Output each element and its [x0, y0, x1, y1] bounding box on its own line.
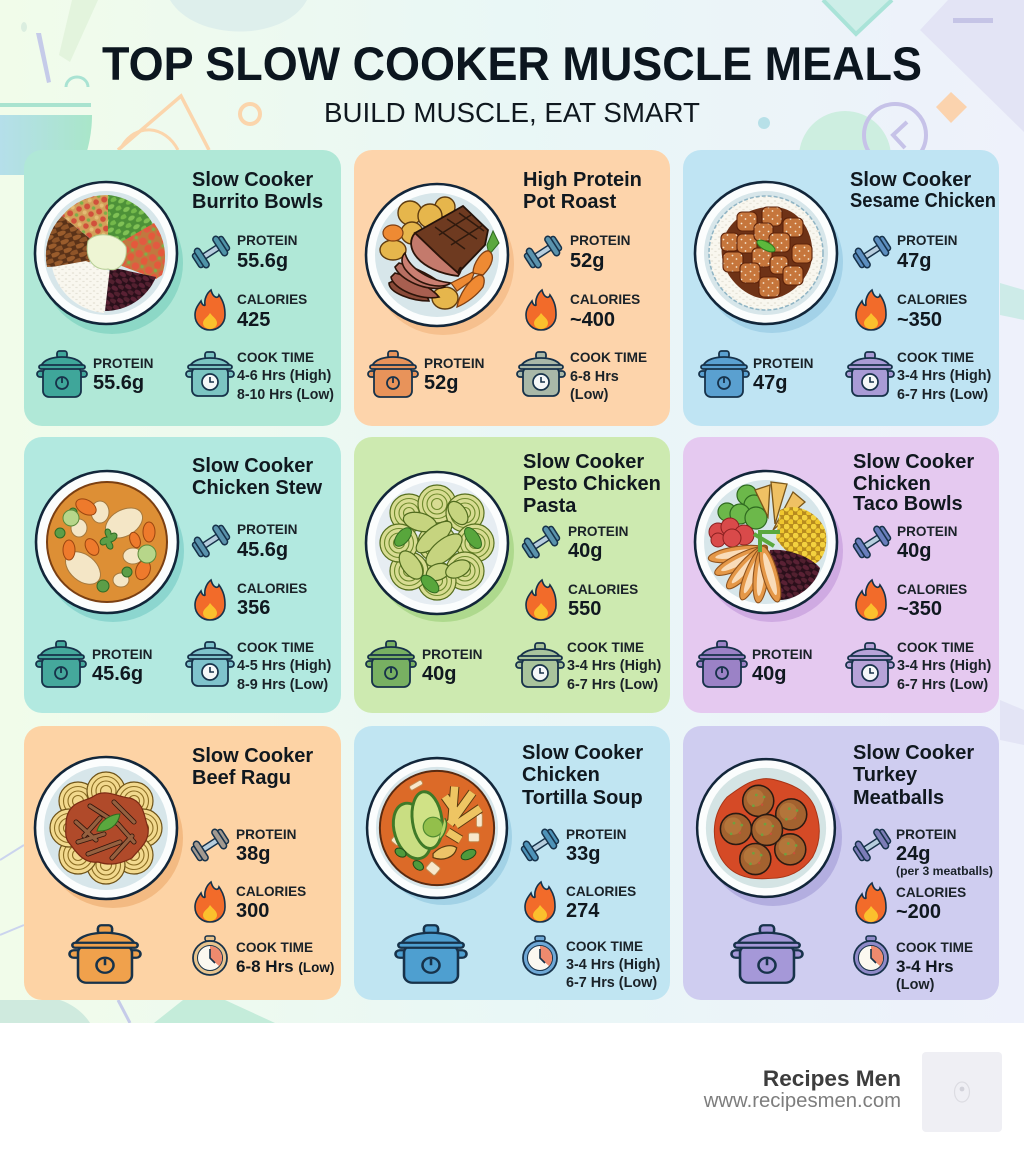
icon: slow cooker [699, 351, 749, 397]
lower protein stat [752, 647, 812, 685]
calories stat: 300 [236, 900, 269, 922]
lower protein stat [753, 356, 813, 394]
calories stat: CALORIES [236, 884, 306, 899]
protein stat: PROTEIN [237, 522, 297, 537]
heading: Slow Cooker [850, 169, 971, 191]
panel: sesame chicken [683, 150, 999, 426]
protein stat: 38g [236, 843, 270, 865]
cook time: COOK TIME [896, 940, 973, 955]
protein stat [566, 827, 626, 865]
icon: stopwatch [193, 936, 227, 975]
cook time: 4-6 Hrs (High) [237, 368, 332, 384]
brand name: Recipes Men [763, 1066, 901, 1091]
icon: dumbbell [851, 233, 893, 271]
icon: flame [856, 290, 886, 330]
plate: pot roast [366, 184, 508, 326]
calories stat: ~350 [897, 309, 942, 331]
calories stat [897, 292, 967, 331]
cook time: 6-7 Hrs (Low) [897, 387, 988, 403]
icon: slow cooker [366, 641, 416, 687]
icon: flame [195, 580, 225, 620]
cook time [897, 640, 992, 693]
plate: chicken stew [36, 471, 178, 613]
icon: cooker timer [846, 643, 894, 687]
cook time: 6-8 Hrs [570, 369, 619, 385]
lower protein stat: 45.6g [92, 663, 143, 685]
lower protein stat: 52g [424, 372, 458, 394]
protein stat: 40g [568, 540, 602, 562]
protein stat: PROTEIN [566, 827, 626, 842]
protein stat: PROTEIN [897, 524, 957, 539]
calories stat: 425 [237, 309, 270, 331]
calories stat [570, 292, 640, 331]
protein stat: PROTEIN [236, 827, 296, 842]
protein stat: PROTEIN [568, 524, 628, 539]
cook time [570, 350, 647, 403]
heading: Tortilla Soup [522, 787, 643, 809]
heading: Slow Cooker [523, 451, 644, 473]
heading [523, 169, 642, 213]
heading: Slow Cooker [192, 745, 313, 767]
protein stat [236, 827, 296, 865]
protein stat: 33g [566, 843, 600, 865]
cook time: 6-8 Hrs (Low) [236, 957, 334, 976]
plate: turkey meatballs [697, 759, 835, 897]
cook time [237, 640, 332, 693]
protein stat [896, 827, 993, 878]
icon: flame [526, 580, 556, 620]
heading: Slow Cooker [853, 451, 974, 473]
heading: Chicken Stew [192, 477, 322, 499]
calories stat: 356 [237, 597, 270, 619]
heading: Chicken [853, 473, 931, 495]
calories stat: 274 [566, 900, 600, 922]
icon: cooker timer [186, 352, 234, 396]
lower protein stat: PROTEIN [752, 647, 812, 662]
icon: dumbbell [851, 523, 893, 561]
protein stat [897, 524, 957, 562]
calories stat [566, 884, 636, 922]
lower protein stat [93, 356, 153, 394]
calories stat: CALORIES [237, 292, 307, 307]
icon: cooker timer [846, 352, 894, 396]
cook time [567, 640, 662, 693]
plate: burrito bowl [35, 182, 177, 324]
lower protein stat [92, 647, 152, 685]
calories stat [568, 582, 638, 620]
calories stat [237, 581, 307, 619]
protein stat [897, 233, 957, 272]
calories stat [236, 884, 306, 922]
heading: Slow Cooker [192, 455, 313, 477]
cook time [566, 939, 661, 991]
cook time: 3-4 Hrs (High) [897, 368, 992, 384]
heading [192, 169, 323, 213]
protein stat: 55.6g [237, 250, 288, 272]
cook time: COOK TIME [237, 350, 314, 365]
lower protein stat: 47g [753, 372, 787, 394]
icon: dumbbell [522, 233, 564, 271]
cook time: 6-7 Hrs (Low) [566, 975, 657, 991]
lower protein stat: 40g [422, 663, 456, 685]
protein stat [237, 233, 297, 272]
plate: tortilla soup [367, 758, 507, 898]
panel: chicken taco bowls [683, 437, 999, 713]
lower protein stat [424, 356, 484, 394]
calories stat: CALORIES [570, 292, 640, 307]
heading: Slow Cooker [522, 742, 643, 764]
heading [853, 742, 974, 809]
heading: Beef Ragu [192, 767, 291, 789]
calories stat [897, 582, 967, 620]
heading: Turkey [853, 764, 918, 786]
icon: stopwatch [523, 936, 557, 975]
logo placeholder [922, 1052, 1002, 1132]
heading [192, 745, 313, 789]
protein stat: (per 3 meatballs) [896, 864, 993, 878]
cook time: COOK TIME [897, 350, 974, 365]
cook time: COOK TIME [567, 640, 644, 655]
icon: stopwatch [854, 936, 888, 975]
cook time: 8-9 Hrs (Low) [237, 677, 328, 693]
icon: slow cooker [37, 351, 87, 397]
heading: High Protein [523, 169, 642, 191]
cook time: 6-7 Hrs (Low) [897, 677, 988, 693]
cook time: COOK TIME [237, 640, 314, 655]
website: www.recipesmen.com [703, 1090, 901, 1112]
heading: Pot Roast [523, 191, 617, 213]
lower protein stat: PROTEIN [93, 356, 153, 371]
icon: dumbbell [519, 826, 561, 864]
lower protein stat: 40g [752, 663, 786, 685]
plate: pesto pasta [366, 472, 508, 614]
calories stat [237, 292, 307, 331]
icon: cooker timer [186, 642, 234, 686]
calories stat: ~350 [897, 598, 942, 620]
icon: flame [856, 883, 886, 923]
heading: Slow Cooker [853, 742, 974, 764]
heading [850, 169, 996, 212]
protein stat [568, 524, 628, 562]
lower protein stat: 55.6g [93, 372, 144, 394]
cook time [237, 350, 334, 403]
heading [523, 451, 661, 517]
heading [853, 451, 974, 515]
calories stat [896, 885, 966, 923]
calories stat: CALORIES [237, 581, 307, 596]
lower protein stat: PROTEIN [424, 356, 484, 371]
icon: slow cooker [396, 925, 466, 983]
protein stat [570, 233, 630, 272]
protein stat: 24g [896, 843, 930, 865]
icon: slow cooker [732, 925, 802, 983]
protein stat: 52g [570, 250, 604, 272]
calories stat: CALORIES [566, 884, 636, 899]
cook time: (Low) [570, 387, 609, 403]
cook time [896, 940, 973, 993]
icon: flame [856, 580, 886, 620]
icon: cooker timer [517, 352, 565, 396]
protein stat: PROTEIN [897, 233, 957, 248]
heading: Sesame Chicken [850, 190, 996, 212]
plate: beef ragu [35, 757, 177, 899]
icon: slow cooker [36, 641, 86, 687]
icon: slow cooker [368, 351, 418, 397]
calories stat: ~400 [570, 309, 615, 331]
plate: taco bowl [695, 471, 837, 613]
heading [522, 742, 643, 809]
cook time: COOK TIME [566, 939, 643, 954]
icon: flame [195, 882, 225, 922]
icon: slow cooker [70, 925, 140, 983]
cook time: COOK TIME [897, 640, 974, 655]
heading [192, 455, 322, 499]
protein stat: 45.6g [237, 539, 288, 561]
cook time: 4-5 Hrs (High) [237, 658, 332, 674]
cook time: COOK TIME [236, 940, 313, 955]
subtitle: BUILD MUSCLE, EAT SMART [324, 97, 700, 128]
cook time: 3-4 Hrs [896, 957, 954, 976]
cook time: 3-4 Hrs (High) [567, 658, 662, 674]
icon: dumbbell [851, 826, 893, 864]
panel: pot roast [354, 150, 670, 426]
cook time: COOK TIME [570, 350, 647, 365]
footer [0, 1023, 1024, 1154]
icon: flame [526, 290, 556, 330]
cook time: 6-7 Hrs (Low) [567, 677, 658, 693]
heading: Meatballs [853, 787, 944, 809]
protein stat: 47g [897, 250, 931, 272]
cook time: (Low) [896, 977, 935, 993]
heading: Slow Cooker [192, 169, 313, 191]
protein stat [237, 522, 297, 561]
title: TOP SLOW COOKER MUSCLE MEALS [102, 37, 922, 90]
panel: turkey meatballs [683, 726, 999, 1000]
cook time: 3-4 Hrs (High) [897, 658, 992, 674]
icon: slow cooker [697, 641, 747, 687]
cook time [897, 350, 992, 403]
calories stat: CALORIES [568, 582, 638, 597]
protein stat: PROTEIN [237, 233, 297, 248]
calories stat: 550 [568, 598, 601, 620]
lower protein stat: PROTEIN [92, 647, 152, 662]
cook time: 8-10 Hrs (Low) [237, 387, 334, 403]
calories stat: ~200 [896, 901, 941, 923]
protein stat: PROTEIN [570, 233, 630, 248]
calories stat: CALORIES [897, 582, 967, 597]
icon: flame [525, 882, 555, 922]
calories stat: CALORIES [897, 292, 967, 307]
cook time [236, 940, 334, 976]
icon: dumbbell [190, 522, 232, 560]
heading: Pasta [523, 495, 577, 517]
heading: Chicken [522, 764, 600, 786]
panel: burrito bowls [24, 150, 341, 426]
panel: beef ragu [24, 726, 341, 1000]
panel: chicken tortilla soup [354, 726, 670, 1000]
plate: sesame chicken [695, 182, 837, 324]
icon: flame [195, 290, 225, 330]
icon: cooker timer [516, 643, 564, 687]
heading: Pesto Chicken [523, 473, 661, 495]
icon: dumbbell [189, 826, 231, 864]
heading: Taco Bowls [853, 493, 963, 515]
lower protein stat: PROTEIN [753, 356, 813, 371]
icon: dumbbell [190, 233, 232, 271]
panel: chicken stew [24, 437, 341, 713]
calories stat: CALORIES [896, 885, 966, 900]
protein stat: PROTEIN [896, 827, 956, 842]
heading: Burrito Bowls [192, 191, 323, 213]
lower protein stat: PROTEIN [422, 647, 482, 662]
panel: pesto chicken pasta [354, 437, 670, 713]
protein stat: 40g [897, 540, 931, 562]
cook time: 3-4 Hrs (High) [566, 957, 661, 973]
lower protein stat [422, 647, 482, 685]
icon: dumbbell [520, 523, 562, 561]
